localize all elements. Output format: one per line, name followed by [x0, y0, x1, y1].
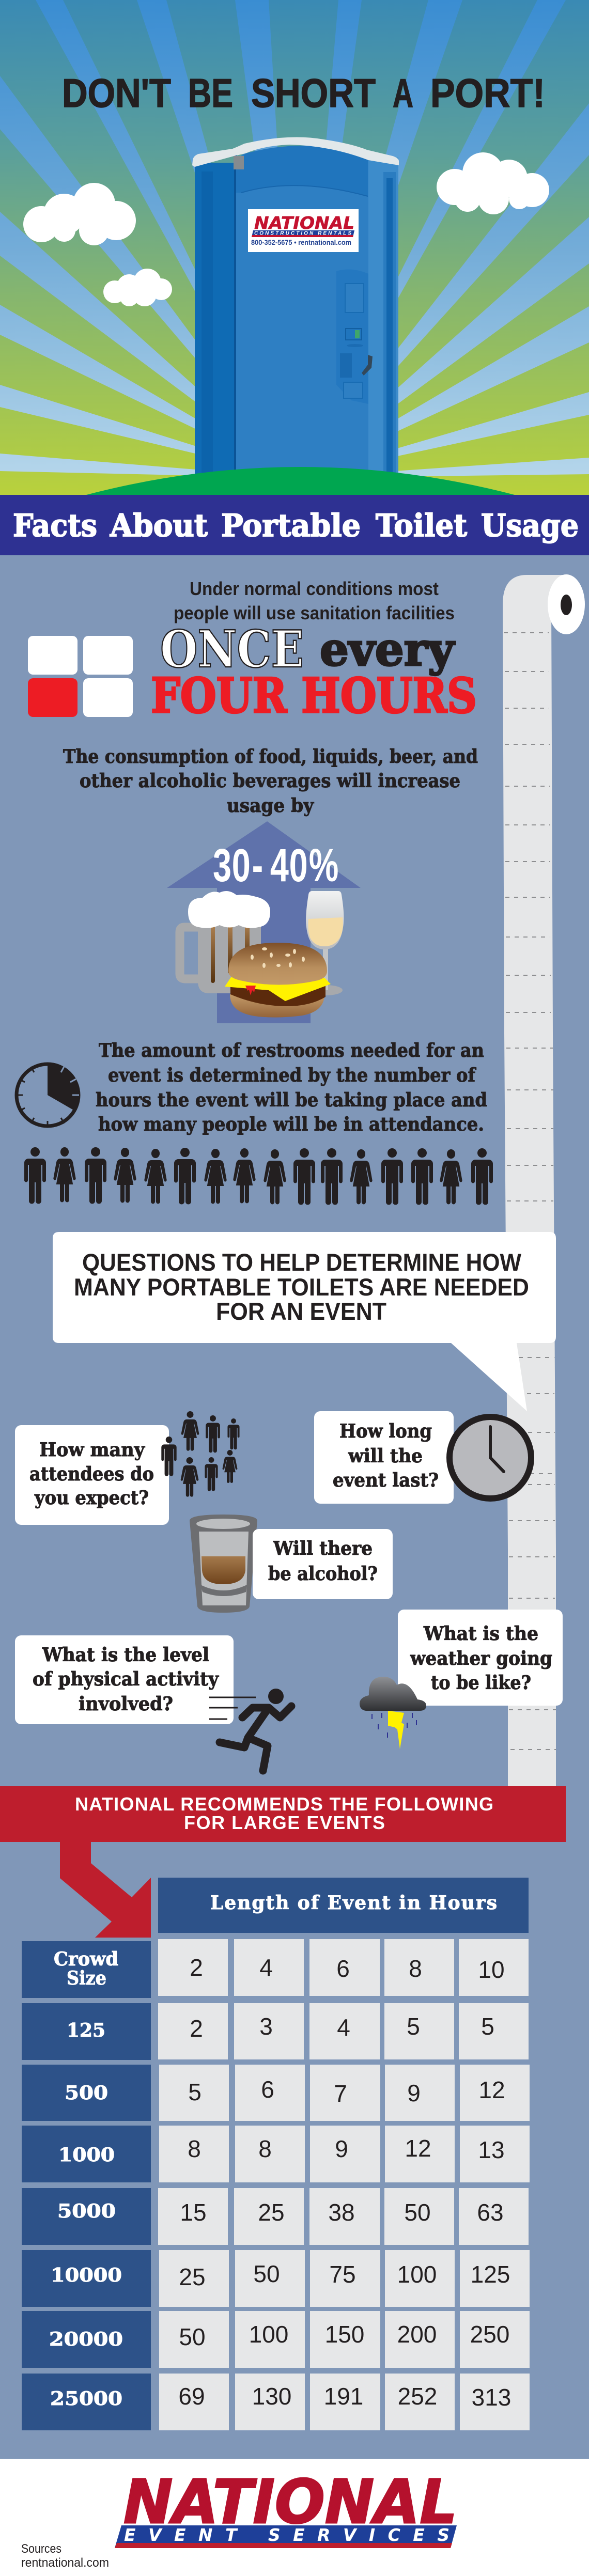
table numbers: 50 [404, 2199, 431, 2226]
heading banner: Facts [13, 508, 97, 544]
table numbers: 25 [258, 2199, 285, 2226]
sources: Sources [21, 2542, 61, 2556]
text: normal conditions: Under normal conditions most [190, 578, 439, 599]
table numbers: 5 [188, 2079, 202, 2105]
callout: attendees: How many [39, 1439, 145, 1461]
heading banner: Usage [481, 508, 579, 544]
red banner with arrow: NATIONAL RECOMMENDS THE FOLLOWING [75, 1793, 493, 1815]
table numbers: 125 [471, 2261, 510, 2288]
callout: weather: What is the [423, 1623, 538, 1645]
text: amount of restrooms: how many people will be in attendance. [98, 1114, 484, 1135]
text: consumption [63, 746, 478, 817]
icon: runner [209, 1689, 291, 1771]
heading banner [0, 495, 589, 555]
table numbers: 15 [180, 2199, 207, 2226]
callout: alcohol: be alcohol? [268, 1563, 378, 1585]
heading banner: Toilet [376, 508, 467, 544]
crowd size labels: 10000 [51, 2265, 122, 2286]
callout: weather: weather going [410, 1648, 552, 1669]
callout: weather [398, 1610, 563, 1706]
icon: clock with shaded sector [16, 1064, 79, 1128]
panel: blue content background [0, 555, 589, 2459]
crowd size labels: 5000 [57, 2200, 116, 2222]
crowd size labels: 500 [65, 2082, 108, 2104]
table numbers: 8 [409, 1955, 422, 1982]
callout: physical activity: What is the level [42, 1644, 209, 1666]
callout: questions heading: QUESTIONS TO HELP DETERMINE HOW [82, 1248, 522, 1276]
roof [192, 137, 399, 167]
table numbers: 313 [472, 2384, 511, 2411]
table header: length of event [158, 1878, 529, 1933]
table numbers: 10 [478, 1956, 505, 1983]
table numbers: 50 [253, 2260, 280, 2287]
table numbers: 12 [405, 2135, 431, 2162]
sign: 800-352-5675 • rentnational.com [251, 238, 351, 246]
table numbers: 4 [337, 2014, 350, 2041]
red banner with arrow: FOR LARGE EVENTS [184, 1812, 385, 1833]
callout: attendees [15, 1425, 169, 1525]
crowd size column [22, 1941, 151, 2430]
callout: alcohol [253, 1529, 393, 1599]
toilet paper roll [503, 574, 585, 1786]
icon: burger [225, 943, 331, 1018]
icon: wine glass [306, 891, 344, 995]
title: BE [188, 70, 233, 116]
callout: attendees: attendees do [29, 1463, 154, 1485]
text: amount of restrooms [96, 1040, 487, 1135]
sunburst rays [0, 0, 589, 478]
text: consumption: other alcoholic beverages will increase [80, 770, 460, 792]
text: once every four hours: FOUR HOURS [151, 667, 477, 724]
table numbers: 252 [398, 2383, 437, 2410]
table numbers: 8 [188, 2135, 201, 2162]
icon: cloud right [437, 152, 549, 214]
sign: CONSTRUCTION RENTALS [254, 230, 351, 237]
grey cells [158, 1939, 530, 2430]
arrow: increase [167, 821, 361, 1023]
crowd size labels: 125 [67, 2020, 105, 2041]
icon: storm cloud [360, 1677, 426, 1749]
table numbers: 7 [334, 2080, 347, 2107]
table: recommended toilets [22, 1878, 530, 2430]
text: amount of restrooms: hours the event will be taking place and [96, 1089, 487, 1111]
callout: weather: to be like? [431, 1672, 531, 1694]
callout: questions heading: MANY PORTABLE TOILETS ARE NEEDED [74, 1273, 529, 1301]
table numbers: 69 [178, 2383, 205, 2410]
table numbers: 38 [328, 2199, 355, 2226]
callout: questions heading [53, 1232, 556, 1411]
table header: length of event: Length of Event in Hours [210, 1892, 497, 1914]
callout: how long [314, 1411, 454, 1504]
table numbers: 3 [259, 2013, 273, 2040]
table numbers: 5 [481, 2013, 494, 2040]
text: normal conditions: people will use sanitation facilities [174, 602, 455, 623]
callout: physical activity: involved? [79, 1693, 173, 1715]
callout: physical activity [15, 1635, 234, 1724]
text: 30-40%: 30-40% [213, 839, 338, 892]
icon: beer mug [180, 891, 270, 993]
table numbers: 250 [470, 2321, 509, 2348]
heading banner: About [110, 508, 208, 544]
icon: cloud left [23, 183, 136, 245]
table numbers: 9 [407, 2080, 421, 2106]
icon: shot glass [190, 1515, 257, 1613]
sources: rentnational.com [21, 2556, 109, 2570]
sign: NATIONAL [254, 213, 354, 233]
title [62, 70, 545, 116]
table numbers: 6 [261, 2076, 274, 2103]
sources [21, 2542, 109, 2570]
icon: cloud small [103, 269, 172, 306]
crowd size labels [49, 1948, 123, 2410]
table numbers: 25 [179, 2263, 206, 2290]
table numbers: 4 [259, 1954, 273, 1981]
table numbers: 100 [249, 2321, 288, 2348]
sign [248, 209, 359, 252]
table numbers: 200 [397, 2321, 437, 2348]
crowd size labels: Crowd [54, 1948, 118, 1970]
table numbers: 75 [329, 2261, 356, 2288]
callout: questions heading: FOR AN EVENT [216, 1298, 386, 1325]
crowd size labels: 25000 [50, 2388, 122, 2410]
icon: wall clock [450, 1417, 531, 1498]
table numbers: 191 [324, 2383, 363, 2410]
table numbers: 8 [258, 2135, 272, 2162]
callout: how long: event last? [333, 1470, 439, 1491]
footer logo: EVENT SERVICES [124, 2525, 450, 2545]
callout: attendees: you expect? [34, 1487, 149, 1509]
crowd size labels: Size [67, 1968, 106, 1989]
callout: physical activity: of physical activity [33, 1668, 219, 1690]
title: PORT! [430, 70, 545, 116]
icon: four squares [28, 636, 133, 717]
table numbers: 2 [190, 1954, 203, 1981]
door handle panel [336, 269, 368, 404]
text: normal conditions [174, 578, 455, 623]
callout: how long: will the [348, 1445, 423, 1467]
table numbers: 130 [252, 2383, 291, 2410]
icon: small crowd [161, 1411, 240, 1497]
table numbers: 150 [325, 2321, 364, 2348]
text: once every four hours [151, 620, 477, 724]
table numbers: 5 [407, 2013, 420, 2040]
crowd size labels: 1000 [58, 2144, 115, 2166]
portable toilet [192, 137, 399, 475]
table numbers: 6 [336, 1955, 350, 1982]
heading banner: Portable [221, 508, 361, 544]
text: once every four hours: ONCE [160, 620, 304, 679]
table numbers: 2 [190, 2015, 203, 2042]
text: once every four hours: every [320, 622, 456, 676]
red banner with arrow [0, 1786, 566, 1938]
table numbers: 63 [477, 2199, 504, 2226]
table numbers: 50 [179, 2323, 206, 2350]
footer logo: NATIONAL [123, 2466, 457, 2537]
text: consumption: usage by [227, 795, 314, 817]
hill [86, 467, 515, 495]
callout: how long: How long [339, 1420, 432, 1442]
text: amount of restrooms: event is determined by the number of [108, 1065, 476, 1086]
table numbers: 12 [478, 2077, 505, 2103]
table numbers [178, 1954, 511, 2411]
table numbers: 13 [478, 2136, 505, 2163]
table numbers: 9 [335, 2135, 348, 2162]
title: SHORT [251, 70, 376, 116]
people row [24, 1147, 493, 1205]
crowd size labels: 20000 [49, 2329, 123, 2350]
panel: hero sky [0, 0, 589, 495]
callout: alcohol: Will there [273, 1538, 373, 1559]
text: amount of restrooms: The amount of restrooms needed for an [99, 1040, 484, 1061]
title: DON'T [62, 70, 171, 116]
table numbers: 100 [397, 2261, 437, 2288]
title: A [393, 70, 413, 116]
text: consumption: The consumption of food, liquids, beer, and [63, 746, 478, 768]
